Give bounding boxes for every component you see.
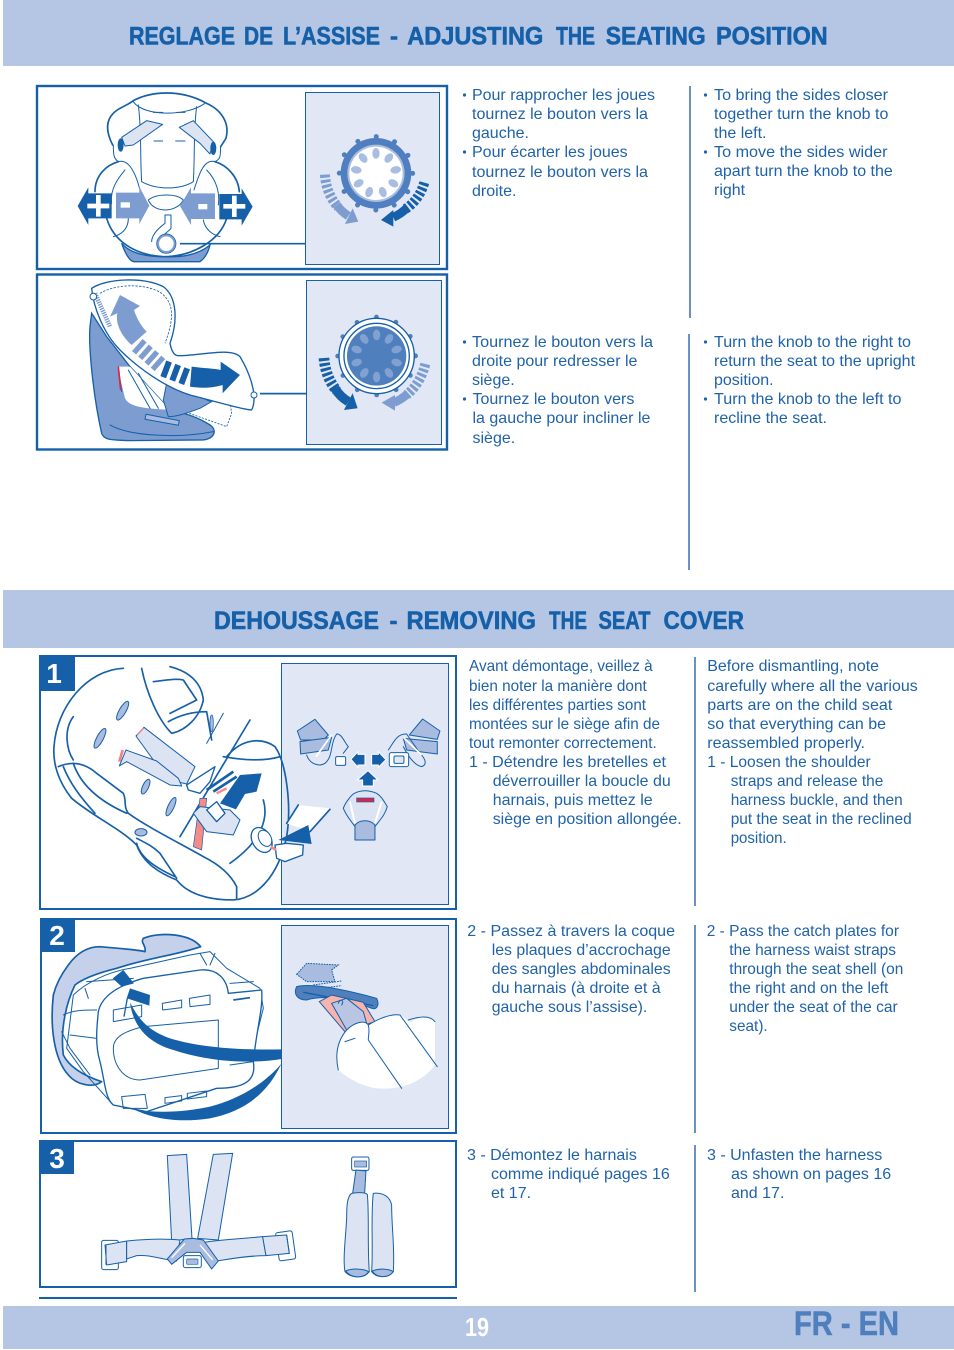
panel: side view of seat with recline xyxy=(37,274,447,450)
icon: seat side view xyxy=(90,280,257,441)
text block: French step 2 xyxy=(467,923,675,1016)
text block: French instructions, sides xyxy=(463,87,655,200)
icon: seat front view xyxy=(95,93,239,262)
text block: English step 2: the right and on the left xyxy=(729,980,889,997)
text block: French step 3: et 17. xyxy=(491,1185,531,1202)
text block: French step 1: bien noter la manière dont xyxy=(469,678,647,695)
badge: number 3: 3 xyxy=(49,1143,65,1174)
heading band: removing the seat cover: - xyxy=(390,607,398,635)
text block: French step 2: des sangles abdominales xyxy=(492,961,671,978)
icon: buckle detail with arrows xyxy=(297,719,440,840)
text block: English instructions, recline: position. xyxy=(714,372,774,389)
icon: forward dark arrow xyxy=(163,362,240,393)
text block: French step 1: déverrouiller la boucle du xyxy=(493,773,671,790)
text block: English step 2: the harness waist straps xyxy=(729,942,896,959)
badge: number 2: 2 xyxy=(49,920,65,951)
text block: English step 1: carefully where all the various xyxy=(707,678,918,695)
heading band: adjusting the seating position: - xyxy=(390,23,398,51)
text block: English instructions, recline: recline the seat. xyxy=(714,410,827,427)
text block: English step 2: 2 - Pass the catch plates for xyxy=(707,923,900,940)
footer band with page number and languages xyxy=(3,1305,954,1349)
text block: French instructions, recline: la gauche pour incliner le xyxy=(472,410,650,427)
text block: English step 1 xyxy=(707,658,918,847)
text block: French step 3 xyxy=(467,1147,670,1202)
text block: French step 2: gauche sous l’assise). xyxy=(492,999,647,1016)
text block: French instructions, sides: tournez le bouton vers la xyxy=(472,164,648,181)
heading band: removing the seat cover: THE xyxy=(549,607,587,635)
heading band: removing the seat cover xyxy=(3,590,954,648)
text block: French step 1 xyxy=(469,658,682,828)
heading band: adjusting the seating position: L’ASSISE xyxy=(283,23,380,51)
text block: English instructions, sides: apart turn the knob to the xyxy=(714,163,893,180)
text block: French step 3: comme indiqué pages 16 xyxy=(491,1166,670,1183)
text block: English instructions, recline xyxy=(704,334,916,427)
text block: French instructions, sides: droite. xyxy=(472,183,516,200)
icon: dial with recline arrows xyxy=(324,317,425,411)
text block: English step 1: Before dismantling, note xyxy=(707,658,879,675)
icon: arrow plus left xyxy=(78,187,112,225)
text block: French instructions, recline: Tournez le bouton vers xyxy=(472,391,634,408)
icon: folded harness pads xyxy=(344,1157,394,1277)
icon: arrow minus right xyxy=(180,187,215,225)
text block: English step 1: put the seat in the reclined xyxy=(731,811,912,828)
text block: French instructions, recline: droite pour redresser le xyxy=(472,353,638,370)
text block: English step 1: reassembled properly. xyxy=(707,735,865,752)
badge: number 1 xyxy=(40,656,75,691)
text block: English step 3 xyxy=(707,1147,891,1202)
text block: English step 1: harness buckle, and then xyxy=(731,792,903,809)
text block: English instructions, sides: the left. xyxy=(714,125,766,142)
footer band with page number and languages: FR - EN xyxy=(794,1305,899,1343)
text block: French instructions, sides: Pour écarter les joues xyxy=(472,144,628,161)
heading band: adjusting the seating position: SEATING xyxy=(606,23,706,51)
panel: step 1 xyxy=(40,656,456,909)
text block: English step 1: parts are on the child seat xyxy=(707,697,893,714)
icon: large dark arrow on buckle xyxy=(220,773,262,809)
heading band: adjusting the seating position: THE xyxy=(556,23,595,51)
text block: French step 1: Avant démontage, veillez à xyxy=(469,658,653,675)
text block: English instructions, sides: To bring the sides closer xyxy=(714,87,889,104)
heading band: adjusting the seating position: DE xyxy=(244,23,273,51)
text block: English step 1: straps and release the xyxy=(731,773,883,790)
icon: dark belt arrows xyxy=(130,1002,282,1062)
text block: French step 2: les plaques d’accrochage xyxy=(492,942,671,959)
text block: English step 2: seat). xyxy=(729,1018,768,1035)
text block: English instructions, recline: Turn the knob to the left to xyxy=(714,391,902,408)
text block: French step 1: 1 - Détendre les bretelles et xyxy=(469,754,667,771)
heading band: removing the seat cover: REMOVING xyxy=(406,607,536,635)
text block: English instructions, recline: Turn the knob to the right to xyxy=(714,334,911,351)
icon: seat with harness being loosened xyxy=(54,667,330,900)
text block: French instructions, recline: siège. xyxy=(472,430,515,447)
panel: step 2 xyxy=(41,919,456,1133)
text block: English step 2 xyxy=(707,923,903,1035)
text block: French step 3: 3 - Démontez le harnais xyxy=(467,1147,637,1164)
heading band: adjusting the seating position xyxy=(3,0,954,66)
icon: harness laid flat xyxy=(102,1153,296,1270)
panel: front view of seat with side adjustment xyxy=(37,86,447,269)
text block: French step 1: tout remonter correctement. xyxy=(469,735,657,752)
heading band: removing the seat cover: COVER xyxy=(664,607,744,635)
text block: French step 1: les différentes parties sont xyxy=(469,697,647,714)
text block: English step 2: through the seat shell (on xyxy=(729,961,903,978)
icon: dial with side arrows xyxy=(325,137,424,227)
text block: English instructions, sides: right xyxy=(714,182,746,199)
heading band: removing the seat cover: SEAT xyxy=(598,607,650,635)
text block: French instructions, recline: siège. xyxy=(472,372,515,389)
text block: French instructions, sides: Pour rapprocher les joues xyxy=(472,87,655,104)
heading band: adjusting the seating position: POSITION xyxy=(716,23,828,51)
text block: English step 3: and 17. xyxy=(731,1185,784,1202)
icon: upward light arrow xyxy=(110,295,162,367)
heading band: adjusting the seating position: ADJUSTING xyxy=(407,23,543,51)
text block: French step 1: harnais, puis mettez le xyxy=(493,792,653,809)
badge: number 3 xyxy=(40,1141,74,1174)
text block: French step 1: siège en position allongée. xyxy=(493,811,682,828)
icon: hand passing catch plate xyxy=(295,963,437,1089)
text block: English step 1: 1 - Loosen the shoulder xyxy=(707,754,871,771)
icon: arrow minus left xyxy=(116,187,149,224)
text block: English step 1: position. xyxy=(731,830,787,847)
icon: dark arrow toward ring xyxy=(278,825,312,844)
text block: French step 1: montées sur le siège afin de xyxy=(469,716,660,733)
icon: arrow plus right xyxy=(219,188,253,226)
text block: English step 1: so that everything can be xyxy=(707,716,886,733)
panel: step 3 xyxy=(40,1141,456,1287)
text block: French instructions, sides: tournez le bouton vers la xyxy=(472,106,648,123)
text block: French instructions, recline xyxy=(463,334,653,447)
text block: English step 3: 3 - Unfasten the harness xyxy=(707,1147,882,1164)
text block: English step 3: as shown on pages 16 xyxy=(731,1166,891,1183)
text block: French instructions, recline: Tournez le bouton vers la xyxy=(472,334,653,351)
text block: French instructions, sides: gauche. xyxy=(472,125,529,142)
text block: French step 2: 2 - Passez à travers la coque xyxy=(467,923,675,940)
text block: English instructions, sides: together turn the knob to xyxy=(714,106,888,123)
heading band: adjusting the seating position: REGLAGE xyxy=(129,23,235,51)
text block: English instructions, recline: return the seat to the upright xyxy=(714,353,916,370)
badge: number 1: 1 xyxy=(46,658,62,689)
text block: French step 2: du harnais (à droite et à xyxy=(492,980,661,997)
badge: number 2 xyxy=(41,919,75,952)
text block: English step 2: under the seat of the car xyxy=(729,999,898,1016)
footer band with page number and languages: 19 xyxy=(465,1312,489,1342)
icon: seat shell underside xyxy=(52,935,282,1120)
heading band: removing the seat cover: DEHOUSSAGE xyxy=(214,607,379,635)
text block: English instructions, sides: To move the sides wider xyxy=(714,144,888,161)
text block: English instructions, sides xyxy=(704,87,893,199)
